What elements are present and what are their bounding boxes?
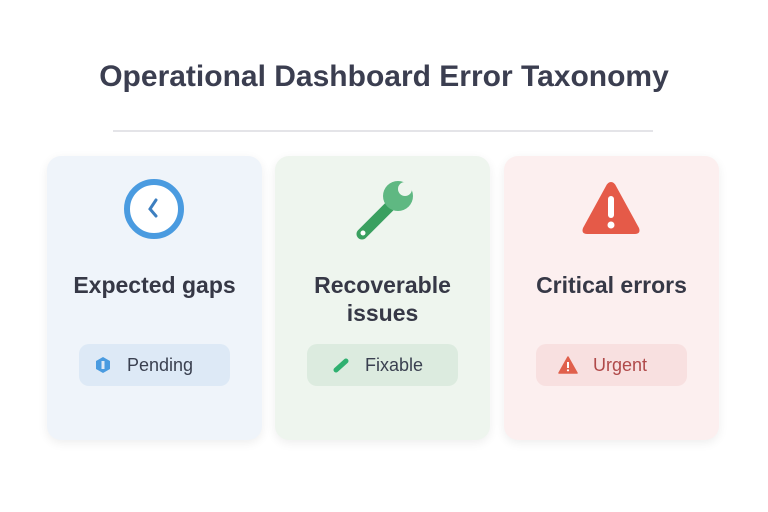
badge: urgent: Urgent xyxy=(593,355,647,375)
title: Operational Dashboard Error Taxonomy xyxy=(99,60,669,93)
icon: warning xyxy=(582,182,640,234)
badge: pending: Pending xyxy=(127,355,193,375)
heading xyxy=(314,272,451,326)
panel: critical errors xyxy=(504,156,719,440)
heading: Critical errors xyxy=(536,272,687,298)
heading: Expected gaps xyxy=(73,272,236,298)
panel: recoverable issues xyxy=(275,156,490,440)
icon: clock xyxy=(124,179,184,239)
badge: fixable: Fixable xyxy=(365,355,423,375)
heading: Recoverable xyxy=(314,272,451,298)
icon: wrench xyxy=(356,181,413,240)
badge: urgent xyxy=(536,344,687,386)
panel: expected gaps xyxy=(47,156,262,440)
heading: issues xyxy=(347,300,418,326)
badge: fixable xyxy=(307,344,458,386)
badge: pending xyxy=(79,344,230,386)
